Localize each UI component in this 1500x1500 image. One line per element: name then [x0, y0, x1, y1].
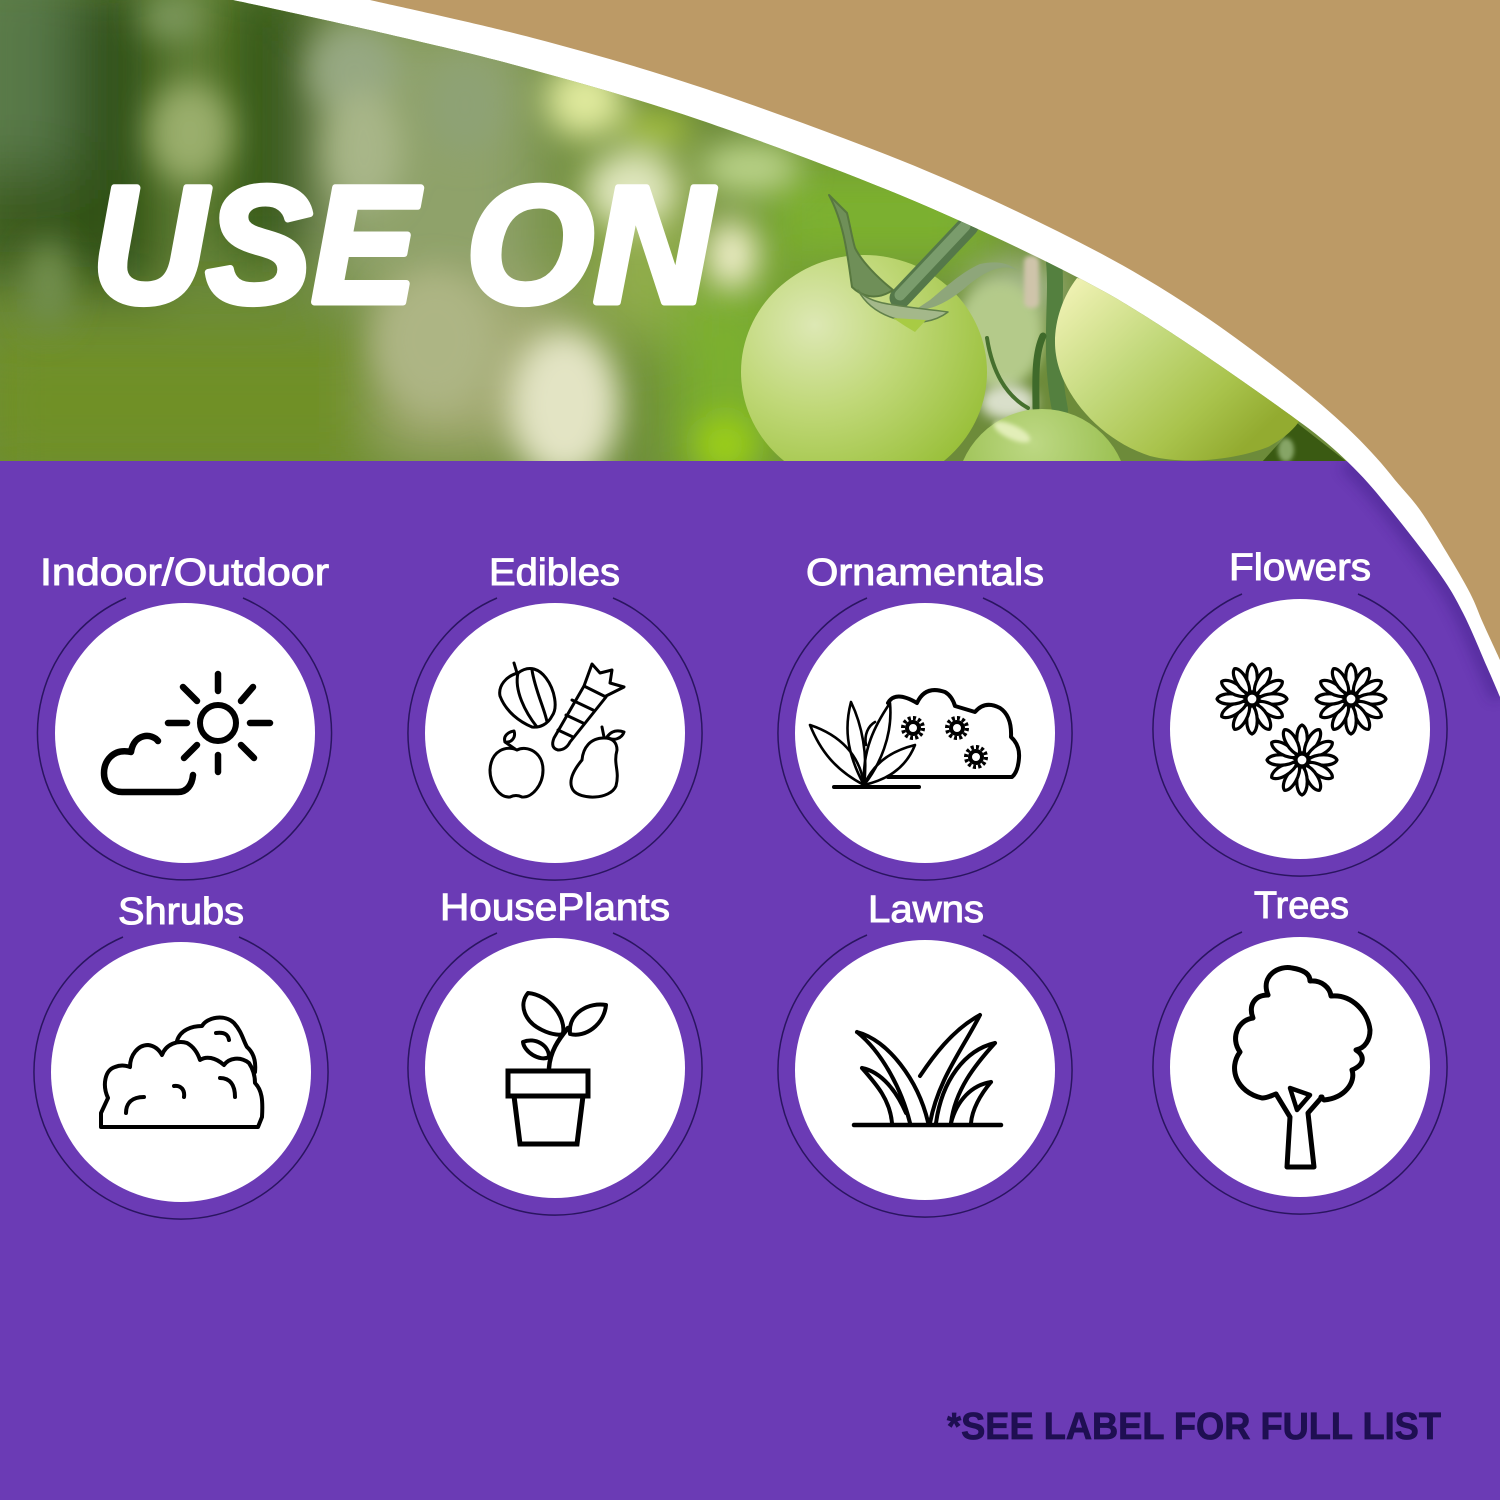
white circle: [425, 603, 685, 863]
item: Ornamentals: [778, 552, 1072, 880]
dark leaves bottom right: [1262, 423, 1347, 462]
tomato bottom: [963, 409, 1121, 461]
tomato highlight: [991, 419, 1032, 444]
tomato left: [741, 255, 987, 461]
item: Lawns: [778, 889, 1072, 1217]
ring: [408, 933, 702, 1215]
purple panel: [0, 461, 1500, 1500]
white circle: [1170, 937, 1430, 1197]
pink out-of-focus stem: [1024, 256, 1039, 308]
vine stems behind the fruit: [987, 262, 1060, 410]
title: USE: [92, 153, 421, 338]
background pale tomato: [956, 281, 1044, 389]
ring: [38, 598, 332, 880]
white circle: [425, 938, 685, 1198]
icon: sun and cloud: [104, 674, 270, 792]
white circle: [55, 603, 315, 863]
footnote: *SEE LABEL FOR FULL LIST: [947, 1406, 1441, 1448]
item: Flowers: [1153, 547, 1447, 876]
label: HousePlants: [440, 887, 670, 929]
label: Trees: [1254, 885, 1349, 927]
pale leaf glints: [1278, 438, 1294, 462]
item: Indoor/Outdoor: [38, 552, 332, 880]
label: Shrubs: [118, 891, 244, 933]
label: Edibles: [489, 552, 620, 594]
white circle: [795, 940, 1055, 1200]
item: Edibles: [408, 552, 702, 880]
icon: three daisies: [1217, 664, 1386, 795]
ring: [1153, 594, 1447, 876]
title: [92, 153, 715, 338]
ring: [34, 937, 328, 1219]
label: Indoor/Outdoor: [40, 552, 329, 594]
ring: [778, 935, 1072, 1217]
white circle: [1170, 599, 1430, 859]
ring: [408, 598, 702, 880]
icon: potted plant: [508, 993, 606, 1144]
label: Lawns: [868, 889, 984, 931]
item: HousePlants: [408, 887, 702, 1215]
photo: green tomatoes on the vine: [0, 0, 1347, 461]
label: Ornamentals: [806, 552, 1044, 594]
pale patch behind stems: [980, 384, 1036, 420]
stem and calyx: [829, 195, 1017, 332]
icon: ornamental bush and leaves: [810, 690, 1019, 787]
icon: grass: [854, 1015, 1001, 1125]
title: ON: [466, 153, 715, 338]
ring: [1153, 932, 1447, 1214]
ring: [778, 598, 1072, 880]
label: Flowers: [1229, 547, 1371, 589]
white circle: [795, 603, 1055, 863]
curve shadow on purple: [1347, 462, 1500, 697]
icon: tree: [1235, 967, 1370, 1167]
icon: pepper, carrot, apple, pear: [490, 663, 624, 797]
item: Trees: [1153, 885, 1447, 1214]
white circle: [51, 942, 311, 1202]
tomato right: [1055, 278, 1300, 461]
item: Shrubs: [34, 891, 328, 1219]
icon: shrub: [101, 1018, 262, 1127]
